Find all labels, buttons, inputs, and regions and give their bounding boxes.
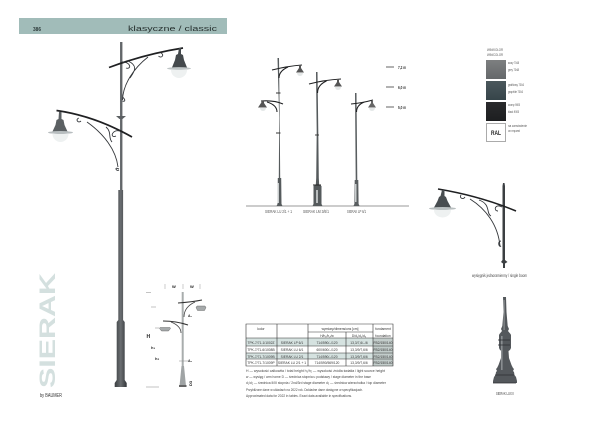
colour swatches xyxy=(486,47,528,142)
lower lamp xyxy=(48,112,73,142)
dimension drawing: W xyxy=(172,284,176,289)
colour swatches: WIN/KOLOR xyxy=(487,47,503,52)
specification table: SIERAK LU 2/1 + 1 xyxy=(278,361,306,365)
swatch: grey 7048 xyxy=(486,60,506,79)
specification table: 13,3/9/7,6/6 xyxy=(350,348,368,352)
height legend xyxy=(386,65,406,110)
specification table: TPK-7/71-7/1009P xyxy=(247,361,275,365)
specification table: 714/590/–/120 xyxy=(316,355,338,359)
specification table: FB2/150/140 xyxy=(374,348,393,352)
specification table: foundation xyxy=(375,334,391,338)
colour swatches: WIN/COLOR xyxy=(487,52,503,57)
section title: klasyczne / classic xyxy=(128,26,218,33)
table notes: d₁/d₂ — średnica II/III stopnia / 2nd/3rd stage diameter d₃ — średnica wierzchołka / top diameter xyxy=(246,380,387,385)
pole captions xyxy=(265,209,366,214)
specification table: 714/590/–/120 xyxy=(316,341,338,345)
specification table: FB2/150/140 xyxy=(374,361,393,365)
table notes: Approximated data for 2022 in tables. Exact data available in specifications. xyxy=(246,393,352,398)
dimension drawing: A₂ xyxy=(188,359,193,363)
base caption: SIERAK LUX II xyxy=(496,391,514,396)
colour swatches: on request xyxy=(508,128,521,133)
swatch: graphite 7016 xyxy=(486,81,506,100)
upper lamp xyxy=(167,48,191,78)
swatch: RAL: RAL xyxy=(491,131,501,137)
specification table: 714/590/569/120 xyxy=(315,361,340,365)
pole captions: SIERAK LM 3/6/1 xyxy=(303,209,329,214)
swatch: black 9005 xyxy=(486,102,506,121)
height legend: 6,0 m xyxy=(398,85,406,90)
colour swatches: czarny 9005 xyxy=(508,102,520,107)
specification table: FB2/150/140 xyxy=(374,355,393,359)
pole captions: SIERAK LU 2/1 + 1 xyxy=(265,209,292,214)
pole height comparison xyxy=(246,58,409,214)
dimension drawing: H xyxy=(146,334,150,340)
dimension drawing: D3 xyxy=(188,380,193,386)
table notes: H — wysokość całkowita / total height h₁/h₂ — wysokość źródła światła / light source height xyxy=(246,368,386,373)
specification table: D/d₁/d₂/d₃ xyxy=(352,334,367,338)
specification table: FB2/150/140 xyxy=(374,341,393,345)
specification table: kolor xyxy=(257,327,265,331)
table notes: w — wysięg / arm home D — średnica stopnia u podstawy / stage diameter in the base xyxy=(246,374,371,379)
height legend: 7,2 m xyxy=(398,65,406,70)
specification table: 600/600/–/120 xyxy=(316,348,338,352)
base detail xyxy=(493,297,517,396)
page number: 386 xyxy=(33,27,41,33)
brand byline: by BAUMER xyxy=(40,393,62,399)
specification table: fundament xyxy=(375,327,391,331)
specification table xyxy=(246,324,393,366)
pole 2 xyxy=(309,72,342,206)
specification table: SIERAK LP 6/1 xyxy=(281,341,303,345)
colour swatches: graphite 7016 xyxy=(508,89,523,94)
single arm detail xyxy=(429,183,527,278)
dimension drawing: h₁ xyxy=(151,345,155,350)
specification table: SIERAK LU 2/1 xyxy=(281,355,304,359)
table notes xyxy=(246,368,387,398)
specification table: wymiary/dimensions [cm] xyxy=(322,327,358,331)
dimension drawing: A₁ xyxy=(188,314,193,318)
arm caption: wysięgnik jednoramienny / single boom xyxy=(472,273,527,278)
height legend: 5,0 m xyxy=(398,105,406,110)
colour swatches: grey 7048 xyxy=(508,67,519,72)
specification table: 13,3/7,6/–/6 xyxy=(350,341,368,345)
lamp head xyxy=(429,190,456,218)
table notes: Przybliżone dane w układach na 2022 rok. Dokładne dane dostępne w specyfikacjach. xyxy=(246,387,363,392)
brand name vertical: SIERAK xyxy=(35,272,60,388)
dimension drawing: h₂ xyxy=(155,356,159,361)
header band xyxy=(19,18,227,34)
colour swatches: szary 7048 xyxy=(508,60,519,65)
colour swatches: grafitowy 7016 xyxy=(508,82,524,87)
dimension drawing: W xyxy=(190,284,194,289)
specification table: TPK-7/71-1/1002Z xyxy=(247,341,275,345)
pole 1 xyxy=(258,58,304,206)
pole 3 xyxy=(351,93,376,206)
specification table: TPK-7/71-6/1008B xyxy=(247,348,275,352)
specification table: SIERAK LU 6/1 xyxy=(281,348,304,352)
main lamp post xyxy=(48,42,191,387)
specification table: H/h₁/h₂/w xyxy=(320,334,334,338)
specification table: 13,3/9/7,6/6 xyxy=(350,361,368,365)
dimension drawing xyxy=(146,284,206,387)
specification table: 13,3/9/7,6/6 xyxy=(350,355,368,359)
pole captions: SIERAK LP 6/1 xyxy=(347,209,366,214)
colour swatches: na zamówienie xyxy=(508,123,528,128)
specification table: TPK-7/71-7/1009B xyxy=(247,355,275,359)
ground line xyxy=(246,205,409,207)
colour swatches: black 9005 xyxy=(508,109,519,114)
